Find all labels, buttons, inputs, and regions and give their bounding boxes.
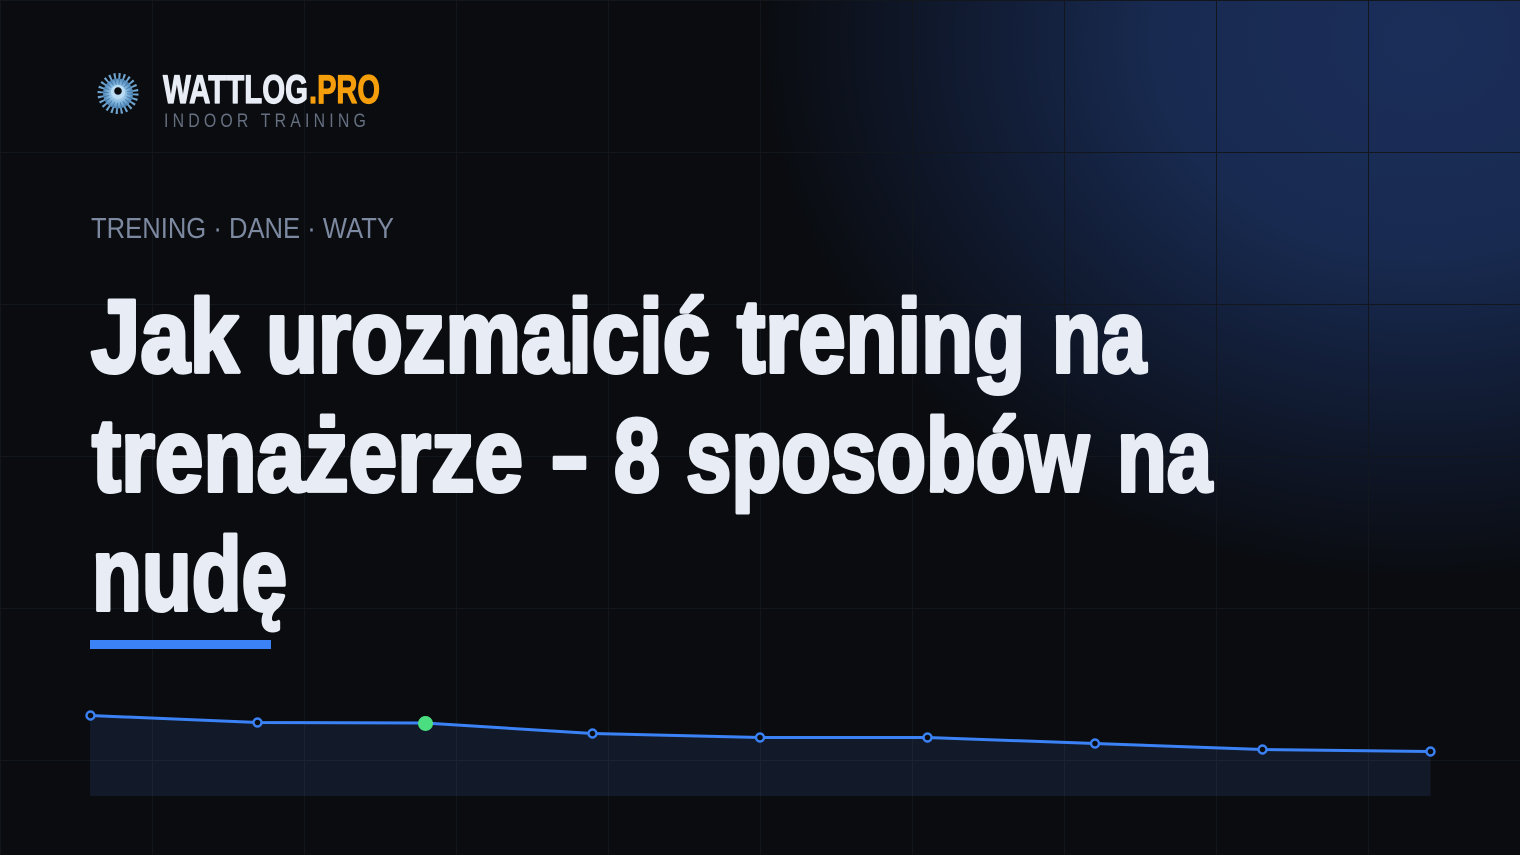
title: trening [737, 279, 1025, 395]
title [91, 279, 1213, 633]
title: 8 [614, 398, 660, 514]
eyebrow: TRENING · DANE · WATY [91, 213, 394, 245]
title: trenażerze [92, 398, 523, 514]
chart markers [86, 712, 1434, 756]
title: – [552, 398, 587, 514]
chart area [90, 716, 1430, 796]
title: sposobów [686, 398, 1090, 514]
title: na [1052, 279, 1147, 395]
logo: cassette icon [100, 76, 136, 111]
brand tagline: INDOOR TRAINING [164, 111, 370, 132]
title: urozmaicić [266, 279, 710, 395]
brand name: .PRO [309, 68, 380, 112]
title: nudę [92, 517, 287, 633]
chart line [90, 716, 1430, 752]
title: Jak [91, 279, 239, 395]
title: na [1117, 398, 1213, 514]
highlighted marker [418, 716, 433, 731]
title underline [90, 640, 271, 649]
brand name: WATTLOG [163, 68, 308, 112]
line chart [86, 712, 1434, 796]
